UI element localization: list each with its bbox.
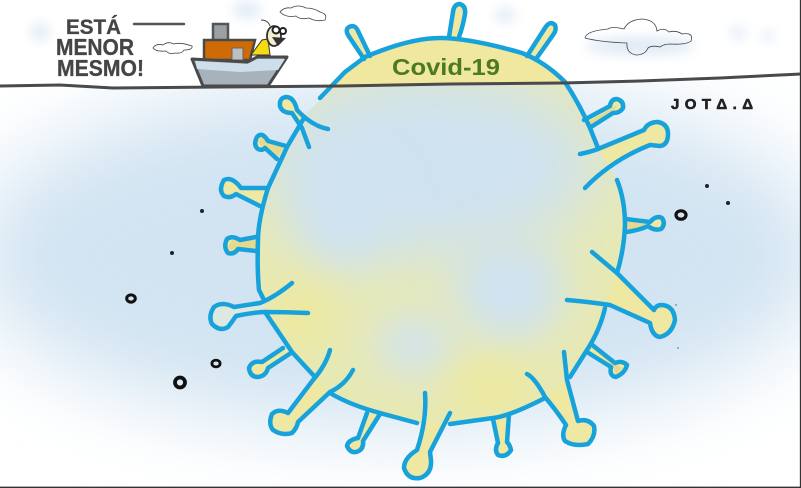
horizon line: [0, 74, 801, 88]
speech text: MENOR: [56, 34, 134, 60]
sky haze blobs: [31, 2, 773, 55]
cloud small top: [280, 6, 326, 21]
cabin: [204, 40, 255, 60]
sailor: [251, 20, 286, 55]
speech dash: [134, 23, 184, 25]
body fill: [260, 40, 623, 424]
boat: [192, 20, 287, 86]
speech text: ESTÁ: [66, 16, 121, 39]
spike fills: [221, 4, 675, 478]
speech text: [56, 16, 144, 81]
virus outline: [210, 4, 675, 478]
cloud large right: [585, 19, 692, 55]
sea background: [0, 80, 801, 430]
window: [232, 48, 243, 60]
droplets: [127, 211, 686, 388]
title: Covid-19: Covid-19: [392, 54, 500, 80]
specks: [170, 184, 730, 349]
left hollow spike fill: [210, 283, 308, 329]
spike tint, small spikes: [228, 104, 650, 375]
virus: [210, 4, 675, 478]
cloud small left: [153, 43, 192, 54]
speech text: MESMO!: [57, 55, 144, 81]
chimney: [213, 24, 228, 41]
hull: [192, 57, 287, 86]
signature: JOTΔ.Δ: [671, 96, 753, 113]
